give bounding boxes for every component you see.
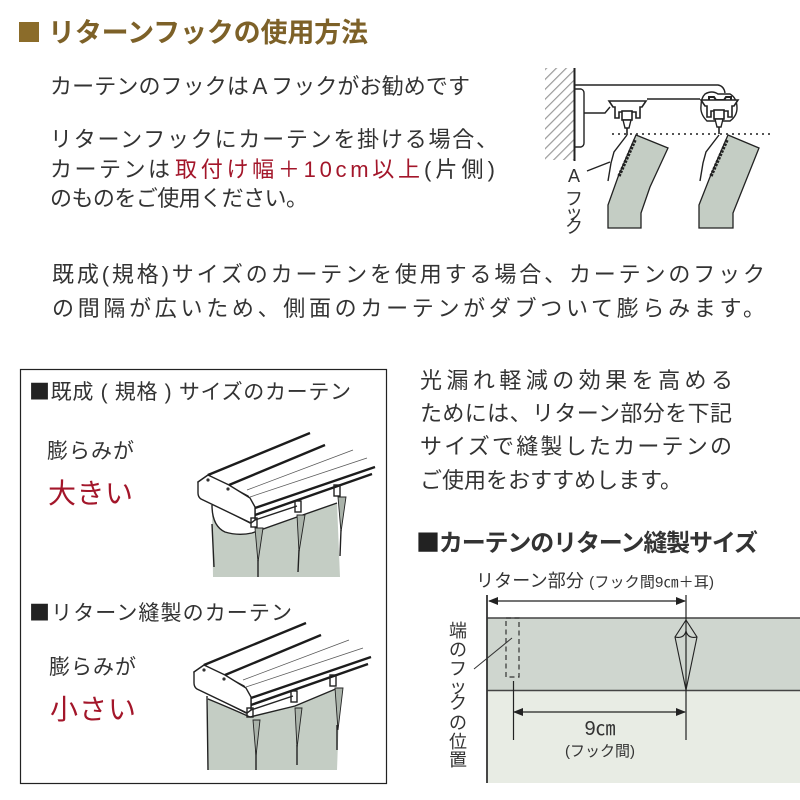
text block: curtain width: カーテンは <box>50 157 170 182</box>
text block: ready-made curtains: の間隔が広いため、側面のカーテンがダブついて膨らみます。 <box>52 296 765 321</box>
arrow: return width <box>489 600 685 602</box>
illustration: rail with return-sewn curtain <box>194 623 371 770</box>
text block: light leak advice: ためには、リターン部分を下記 <box>420 401 732 426</box>
label: large: 大きい <box>48 478 133 509</box>
text block: curtain width: 取付け幅＋10cm以上 <box>175 157 420 182</box>
text block: recommendation: カーテンのフックはＡフックがお勧めです <box>50 74 470 99</box>
label: bulge: 膨らみが <box>49 656 136 679</box>
text block: curtain width: (片側) <box>424 157 495 182</box>
label: bulge: 膨らみが <box>47 440 134 463</box>
hook position: dashed <box>506 618 519 677</box>
text block: light leak advice <box>420 368 733 493</box>
heading: return sewing size: ■カーテンのリターン縫製サイズ <box>416 523 758 558</box>
text block: curtain width: のものをご使用ください。 <box>50 186 308 211</box>
text block: light leak advice: サイズで縫製したカーテンの <box>420 434 732 459</box>
diagram: A hook side view: Aフック <box>565 166 583 237</box>
heading: ready-made curtain: ■既成 ( 規格 ) サイズのカーテン <box>29 376 351 406</box>
text block: light leak advice: ご使用をおすすめします。 <box>420 468 682 493</box>
label: 9cm: 9㎝ <box>584 718 616 740</box>
arrow: hook spacing <box>514 711 685 713</box>
diagram: A hook side view <box>545 68 770 237</box>
label: return part: リターン部分 (フック間9㎝＋耳) <box>476 571 714 591</box>
heading: return-sewn curtain: ■リターン縫製のカーテン <box>29 597 292 627</box>
text block: ready-made curtains: 既成(規格)サイズのカーテンを使用する場合、カーテンのフック <box>52 262 765 287</box>
illustration: rail with ready-made curtain <box>198 433 375 577</box>
label: hook spacing: (フック間) <box>565 743 635 760</box>
text block: curtain width: リターンフックにカーテンを掛ける場合、 <box>50 127 498 152</box>
panel: comparison <box>20 370 386 784</box>
icon: pleat hook <box>675 620 697 690</box>
leader line <box>474 638 512 669</box>
label: small: 小さい <box>50 694 136 725</box>
diagram: return sewing dimensions <box>449 571 800 783</box>
text block: light leak advice: 光漏れ軽減の効果を高める <box>420 368 733 393</box>
label: end hook position: 端のフックの位置 <box>449 621 467 770</box>
text block: curtain width <box>50 127 498 211</box>
text block: ready-made curtains <box>52 262 765 321</box>
title: リターンフックの使用方法 <box>48 18 368 48</box>
